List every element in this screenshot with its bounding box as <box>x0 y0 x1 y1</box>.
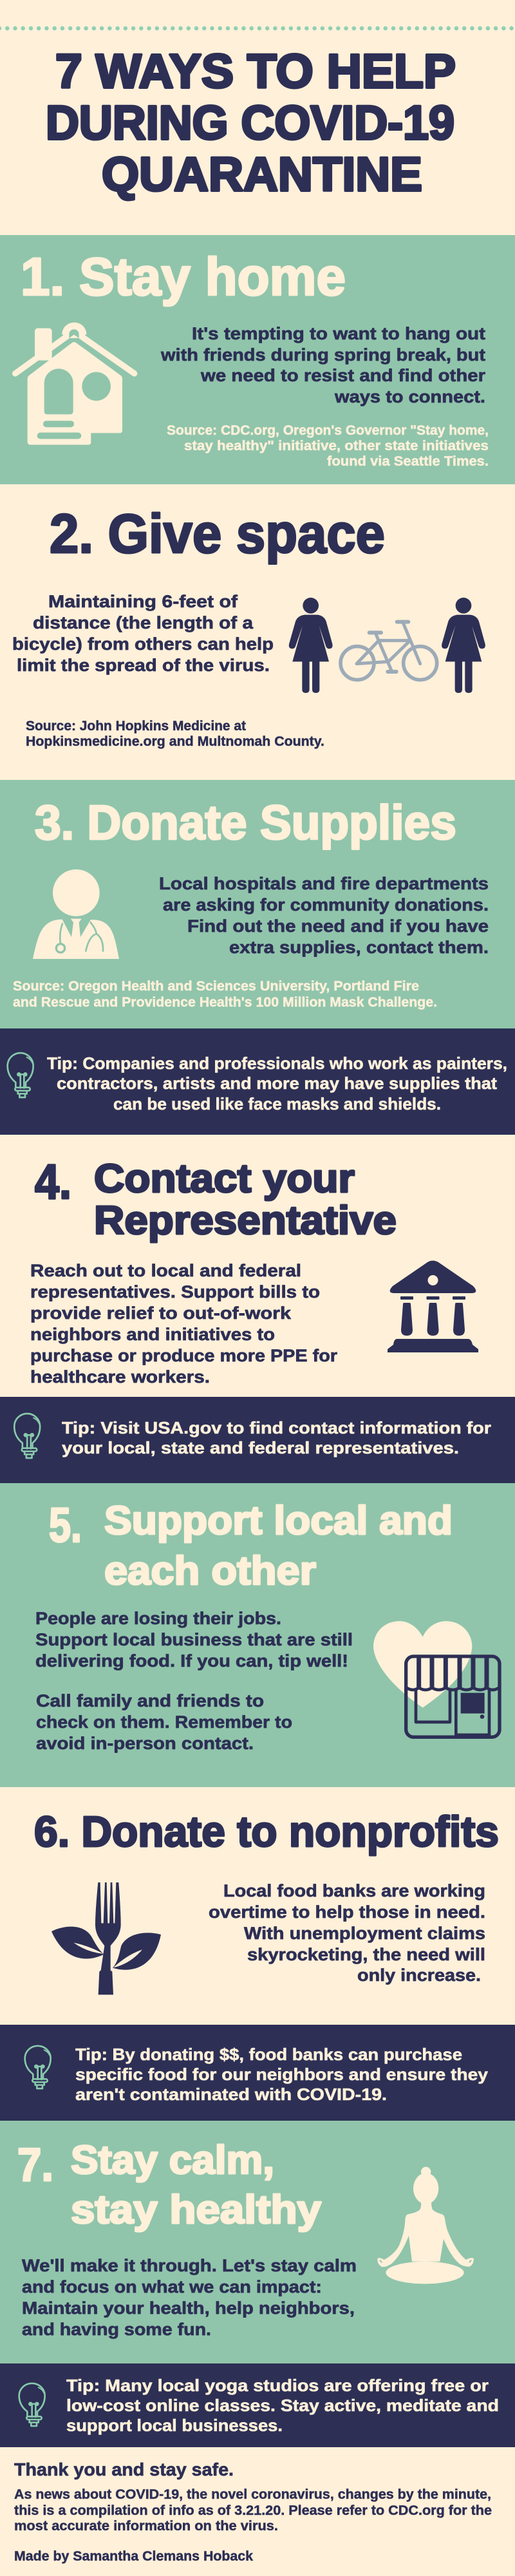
panel: 6 donate to nonprofits <box>0 1787 515 2025</box>
heading: 4. Contact your Representative: Representative <box>94 1198 397 1243</box>
text: tip yoga <box>66 2376 499 2435</box>
text: stay home body: It's tempting to want to hang out <box>192 324 485 343</box>
text: tip food banks: Tip: By donating $$, food banks can purchase <box>75 2045 462 2064</box>
text: give space body: Maintaining 6-feet of <box>48 592 238 611</box>
text: tip yoga: low-cost online classes. Stay active, meditate and <box>66 2396 499 2415</box>
icon: fork and leaves <box>52 1882 161 1994</box>
icon: person left <box>289 598 333 693</box>
heading: 5. Support local and each other: each other <box>104 1549 316 1593</box>
icon: bicycle <box>341 622 437 680</box>
text: call family <box>36 1691 292 1753</box>
text: support local body: Support local business that are still <box>35 1630 353 1649</box>
heading: thank you: Thank you and stay safe. <box>14 2459 234 2479</box>
title <box>46 44 456 201</box>
heading: 7. Stay calm, stay healthy: 7. <box>17 2139 53 2191</box>
text: nonprofits body: Local food banks are working <box>223 1881 485 1900</box>
text: support local body: People are losing their jobs. <box>35 1609 281 1628</box>
panel: 1 stay home <box>0 235 515 484</box>
text: give space body <box>12 592 274 675</box>
icon: doctor <box>33 869 119 959</box>
text: stay home body: we need to resist and find other <box>200 366 486 385</box>
heading: 2. Give space: 2. Give space <box>50 504 385 565</box>
text: donate supplies body: Find out the need and if you have <box>187 916 489 936</box>
heading: 7. Stay calm, stay healthy: stay healthy <box>71 2188 322 2232</box>
source: stay home <box>167 423 489 469</box>
text: nonprofits body: With unemployment claims <box>244 1924 485 1943</box>
text: tip supplies <box>47 1054 507 1113</box>
panel: tip representatives <box>0 1397 515 1483</box>
text: support local body <box>35 1609 353 1671</box>
text: nonprofits body <box>209 1881 485 1985</box>
panel: tip supplies <box>0 1028 515 1135</box>
text: stay home body: ways to connect. <box>334 387 485 406</box>
panel: 3 donate supplies <box>0 780 515 1028</box>
icon: distance figures and bicycle <box>289 598 485 693</box>
text: call family: check on them. Remember to <box>36 1712 292 1732</box>
icon: heart and storefront <box>373 1621 500 1737</box>
text: give space body: distance (the length of a <box>33 613 254 632</box>
text: disclaimer: most accurate information on the virus. <box>14 2519 278 2533</box>
text: contact body <box>30 1261 338 1387</box>
panel: footer <box>0 2447 515 2576</box>
heading: 4. Contact your Representative: Contact your <box>94 1157 355 1201</box>
source: donate supplies: Source: Oregon Health and Sciences University, Portland Fire <box>13 979 419 994</box>
text: tip food banks: specific food for our neighbors and ensure they <box>75 2065 489 2084</box>
text: tip representatives: Tip: Visit USA.gov to find contact information for <box>62 1418 491 1437</box>
source: give space <box>26 719 324 749</box>
text: give space body: bicycle) from others can help <box>12 634 274 654</box>
panel: 5 support local <box>0 1483 515 1787</box>
source: give space: Hopkinsmedicine.org and Multnomah County. <box>26 734 324 749</box>
text: stay calm body <box>22 2256 357 2339</box>
source: donate supplies: and Rescue and Providence Health's 100 Million Mask Challenge. <box>13 995 437 1010</box>
text: credit: Made by Samantha Clemans Hoback <box>14 2549 253 2564</box>
text: tip yoga: support local businesses. <box>66 2416 283 2435</box>
icon: house <box>15 323 135 445</box>
text: disclaimer: this is a compilation of info as of 3.21.20. Please refer to CDC.org for the <box>14 2503 492 2518</box>
text: stay calm body: and having some fun. <box>22 2320 211 2339</box>
text: support local body: delivering food. If you can, tip well! <box>35 1651 348 1671</box>
icon: light bulb <box>19 2383 45 2426</box>
text: give space body: limit the spread of the virus. <box>17 656 270 675</box>
text: call family: avoid in-person contact. <box>36 1734 254 1753</box>
panel: title header <box>0 0 515 235</box>
source: stay home: found via Seattle Times. <box>327 454 489 469</box>
panel: 7 stay calm <box>0 2121 515 2363</box>
heading: 4. Contact your Representative <box>35 1155 397 1243</box>
heading: 6. Donate to nonprofits: 6. Donate to nonprofits <box>34 1808 499 1856</box>
icon: government building <box>388 1261 478 1352</box>
text: stay calm body: We'll make it through. Let's stay calm <box>22 2256 357 2275</box>
text: tip representatives: your local, state and federal representatives. <box>62 1438 459 1457</box>
heading: 4. Contact your Representative: 4. <box>35 1155 71 1209</box>
text: disclaimer: As news about COVID-19, the novel coronavirus, changes by the minute, <box>14 2487 491 2502</box>
icon: light bulb <box>8 1053 33 1097</box>
icon: light bulb <box>14 1414 40 1458</box>
text: contact body: healthcare workers. <box>30 1367 210 1387</box>
source: stay home: stay healthy" initiative, other state initiatives <box>184 439 489 453</box>
text: tip representatives <box>62 1418 491 1457</box>
text: contact body: provide relief to out-of-work <box>30 1303 292 1323</box>
heading: 7. Stay calm, stay healthy: Stay calm, <box>71 2138 274 2183</box>
panel: 4 contact your representative <box>0 1135 515 1397</box>
heading: 1. Stay home: 1. Stay home <box>21 247 346 307</box>
text: donate supplies body: extra supplies, contact them. <box>229 938 489 957</box>
panel: tip food banks <box>0 2025 515 2121</box>
heading: 5. Support local and each other: 5. <box>49 1498 82 1552</box>
text: tip food banks <box>75 2045 489 2104</box>
text: stay home body: with friends during spring break, but <box>160 345 485 365</box>
title: QUARANTINE <box>102 147 422 201</box>
heading: 3. Donate Supplies: 3. Donate Supplies <box>35 795 456 849</box>
text: stay calm body: and focus on what we can impact: <box>22 2277 322 2297</box>
text: stay home body <box>160 324 486 406</box>
text: donate supplies body: are asking for community donations. <box>163 895 489 914</box>
heading: 5. Support local and each other <box>49 1498 453 1593</box>
text: stay calm body: Maintain your health, help neighbors, <box>22 2298 355 2318</box>
text: tip yoga: Tip: Many local yoga studios are offering free or <box>66 2376 489 2395</box>
text: tip food banks: aren't contaminated with COVID-19. <box>75 2085 387 2104</box>
text: tip supplies: Tip: Companies and professionals who work as painters, <box>47 1054 507 1073</box>
text: call family: Call family and friends to <box>36 1691 264 1710</box>
title: DURING COVID-19 <box>46 96 454 149</box>
text: donate supplies body <box>159 874 489 957</box>
text: contact body: Reach out to local and federal <box>30 1261 301 1280</box>
text: contact body: representatives. Support bills to <box>30 1282 320 1302</box>
icon: meditating figure <box>377 2167 474 2284</box>
text: contact body: neighbors and initiatives to <box>30 1325 275 1344</box>
text: nonprofits body: skyrocketing, the need will <box>247 1945 485 1964</box>
text: nonprofits body: only increase. <box>357 1965 481 1985</box>
panel: tip yoga <box>0 2363 515 2447</box>
text: tip supplies: can be used like face masks and shields. <box>113 1094 441 1113</box>
source: stay home: Source: CDC.org, Oregon's Governor "Stay home, <box>167 423 489 438</box>
text: nonprofits body: overtime to help those in need. <box>209 1902 485 1922</box>
icon: light bulb <box>25 2046 51 2088</box>
source: donate supplies <box>13 979 437 1010</box>
heading: 5. Support local and each other: Support local and <box>104 1499 453 1543</box>
text: contact body: purchase or produce more PPE for <box>30 1346 338 1365</box>
panel: 2 give space <box>0 484 515 780</box>
icon: person right <box>442 598 485 693</box>
text: tip supplies: contractors, artists and more may have supplies that <box>57 1074 497 1093</box>
text: donate supplies body: Local hospitals and fire departments <box>159 874 489 893</box>
text: disclaimer <box>14 2487 492 2533</box>
heading: 7. Stay calm, stay healthy <box>17 2138 322 2232</box>
title: 7 WAYS TO HELP <box>55 44 456 98</box>
source: give space: Source: John Hopkins Medicine at <box>26 719 246 734</box>
